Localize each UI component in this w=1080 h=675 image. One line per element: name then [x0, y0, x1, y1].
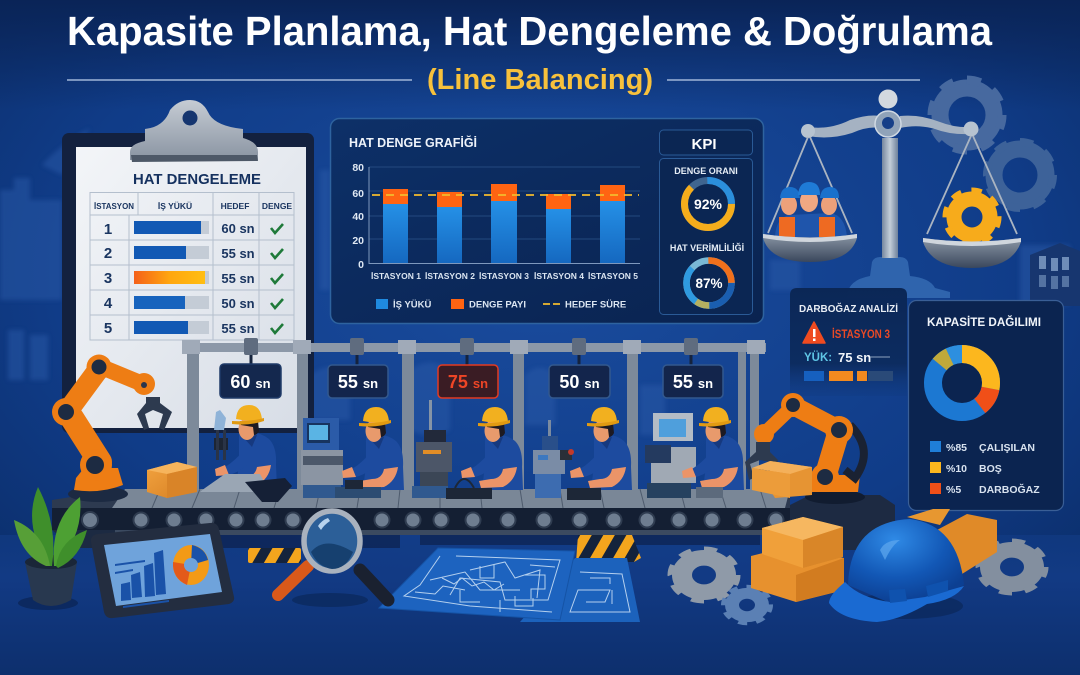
- KPI box: [660, 158, 752, 314]
- donut: balance ratio: 92%: [694, 196, 723, 212]
- chart title: HAT DENGE GRAFİĞİ: [349, 135, 477, 150]
- sign: 50 sn: 50 sn: [559, 372, 600, 392]
- table: [90, 192, 294, 340]
- sign: 50 sn: [549, 365, 610, 398]
- warning icon: [803, 322, 825, 343]
- table: 55 sn: [221, 271, 255, 286]
- panel: bottleneck analysis: İSTASYON 3: [832, 328, 890, 341]
- station frame: [182, 338, 766, 490]
- plant: [14, 487, 87, 610]
- gripper: [137, 397, 172, 430]
- gear gray right: [979, 541, 1045, 593]
- worker: [570, 407, 632, 490]
- panel: capacity distribution: [908, 300, 1064, 510]
- robot arm right with base: [745, 393, 895, 550]
- background gear large: [932, 80, 1002, 150]
- hazard block right: [576, 535, 641, 562]
- table: 50 sn: [221, 296, 255, 311]
- left pan with workers: [763, 137, 857, 262]
- hazard block left: [248, 548, 301, 563]
- gear icon: [946, 191, 998, 243]
- sign: 55 sn: [663, 365, 723, 398]
- gripper: [745, 442, 778, 480]
- rollers: [82, 512, 784, 528]
- chart legend: HEDEF SÜRE: [565, 300, 626, 310]
- clipboard back: [62, 133, 314, 433]
- stacked bar chart: 80: [352, 162, 364, 174]
- panel: bottleneck analysis: YÜK:: [804, 351, 832, 364]
- sign: 55 sn: 55 sn: [673, 372, 713, 392]
- chart legend: DENGE PAYI: [469, 300, 526, 310]
- stacked bar chart: 40: [352, 211, 364, 223]
- sign: 60 sn: [220, 364, 281, 398]
- table: İŞ YÜKÜ: [158, 201, 192, 211]
- legend: %85: [946, 442, 967, 454]
- table: DENGE: [262, 201, 292, 211]
- table heading: HAT DENGELEME: [133, 171, 261, 188]
- donut chart: [933, 354, 991, 412]
- background building: [1030, 243, 1080, 306]
- tool: [214, 410, 228, 460]
- stacked bar chart: 20: [352, 235, 364, 247]
- title: Kapasite Planlama, Hat Dengeleme & Doğrulama: [67, 8, 993, 54]
- table: 2: [104, 245, 112, 262]
- workstation 3: [412, 400, 523, 499]
- stacked bar chart: İSTASYON 1: [371, 271, 421, 281]
- legend: %10: [946, 463, 967, 475]
- gear gray left: [671, 549, 737, 601]
- panel: bottleneck analysis: [790, 288, 907, 396]
- sign: 55 sn: [328, 365, 388, 398]
- chart legend: [376, 299, 626, 310]
- stacked bar chart: 0: [358, 259, 364, 271]
- table: 1: [104, 221, 112, 238]
- blue hard hat: [829, 519, 964, 622]
- legend: %5: [946, 484, 961, 496]
- machine: [645, 413, 696, 498]
- machine: [533, 420, 574, 498]
- sign: 75 sn: [438, 365, 498, 398]
- worker: [461, 407, 523, 490]
- KPI header: [660, 130, 752, 155]
- workstation 5: [645, 407, 744, 498]
- conveyor belt: [52, 489, 792, 548]
- table: 5: [104, 320, 112, 337]
- balance scale: [763, 90, 1021, 298]
- KPI header: KPI: [691, 136, 717, 153]
- tablet: [91, 523, 234, 618]
- KPI box: HAT VERİMLİLİĞİ: [670, 242, 744, 253]
- subtitle: (Line Balancing): [427, 64, 653, 96]
- stacked bar chart: İSTASYON 5: [588, 271, 638, 281]
- worker: [682, 407, 744, 490]
- machine: [301, 418, 343, 498]
- stacked bar chart: İSTASYON 4: [534, 271, 584, 281]
- gear blue small: [724, 587, 770, 623]
- worker: [215, 405, 277, 488]
- KPI box: DENGE ORANI: [674, 166, 738, 176]
- donut: line efficiency: 87%: [695, 276, 723, 291]
- donut: line efficiency: [686, 260, 732, 306]
- background gear small: [987, 142, 1053, 208]
- stacked bar chart: İSTASYON 3: [479, 271, 529, 281]
- panel: line balance chart: [330, 118, 764, 324]
- legend: BOŞ: [979, 463, 1002, 475]
- panel: bottleneck analysis: DARBOĞAZ ANALİZİ: [799, 302, 898, 315]
- panel: clipboard table: [62, 100, 314, 433]
- workstation 2: [301, 407, 404, 498]
- table: HEDEF: [221, 201, 249, 211]
- tablet pie: [173, 545, 209, 585]
- stacked bar chart: 60: [352, 188, 364, 200]
- crate on belt left: [147, 462, 197, 498]
- table: 4: [104, 295, 113, 312]
- magnifying glass: [278, 511, 388, 607]
- panel: bottleneck analysis: 75 sn: [838, 350, 871, 365]
- robot arm left: [52, 354, 172, 502]
- legend: ÇALIŞILAN: [979, 442, 1035, 454]
- stacked bar chart: [352, 162, 640, 281]
- stacked boxes: [751, 517, 844, 602]
- load bar: [804, 371, 893, 381]
- worker: [342, 407, 404, 490]
- table: 55 sn: [221, 246, 255, 261]
- stacked bar chart: İSTASYON 2: [425, 271, 475, 281]
- sign: 75 sn: 75 sn: [448, 372, 488, 392]
- workstation 4: [533, 407, 632, 500]
- back boxes: [907, 509, 997, 574]
- legend: DARBOĞAZ: [979, 483, 1040, 496]
- panel: capacity distribution: KAPASİTE DAĞILIMI: [927, 314, 1041, 329]
- sign: 55 sn: 55 sn: [338, 372, 378, 392]
- blueprint: [379, 548, 640, 622]
- table: 60 sn: [221, 221, 255, 236]
- chart legend: İŞ YÜKÜ: [393, 300, 432, 310]
- table: 55 sn: [221, 321, 255, 336]
- machine: [412, 400, 452, 498]
- table: 3: [104, 270, 112, 287]
- scale base and post: [847, 138, 950, 298]
- table: İSTASYON: [94, 201, 134, 211]
- crate on belt right: [752, 461, 812, 498]
- clip: [130, 100, 258, 162]
- station time signs: [220, 355, 723, 398]
- belt surface: [112, 489, 790, 508]
- scale beam: [801, 90, 978, 138]
- sign: 60 sn: 60 sn: [230, 372, 271, 392]
- donut: balance ratio: [684, 180, 732, 228]
- legend: [930, 441, 1040, 496]
- right pan with gear: [923, 136, 1021, 268]
- three workers: [775, 182, 847, 237]
- workstation 1: [200, 405, 292, 502]
